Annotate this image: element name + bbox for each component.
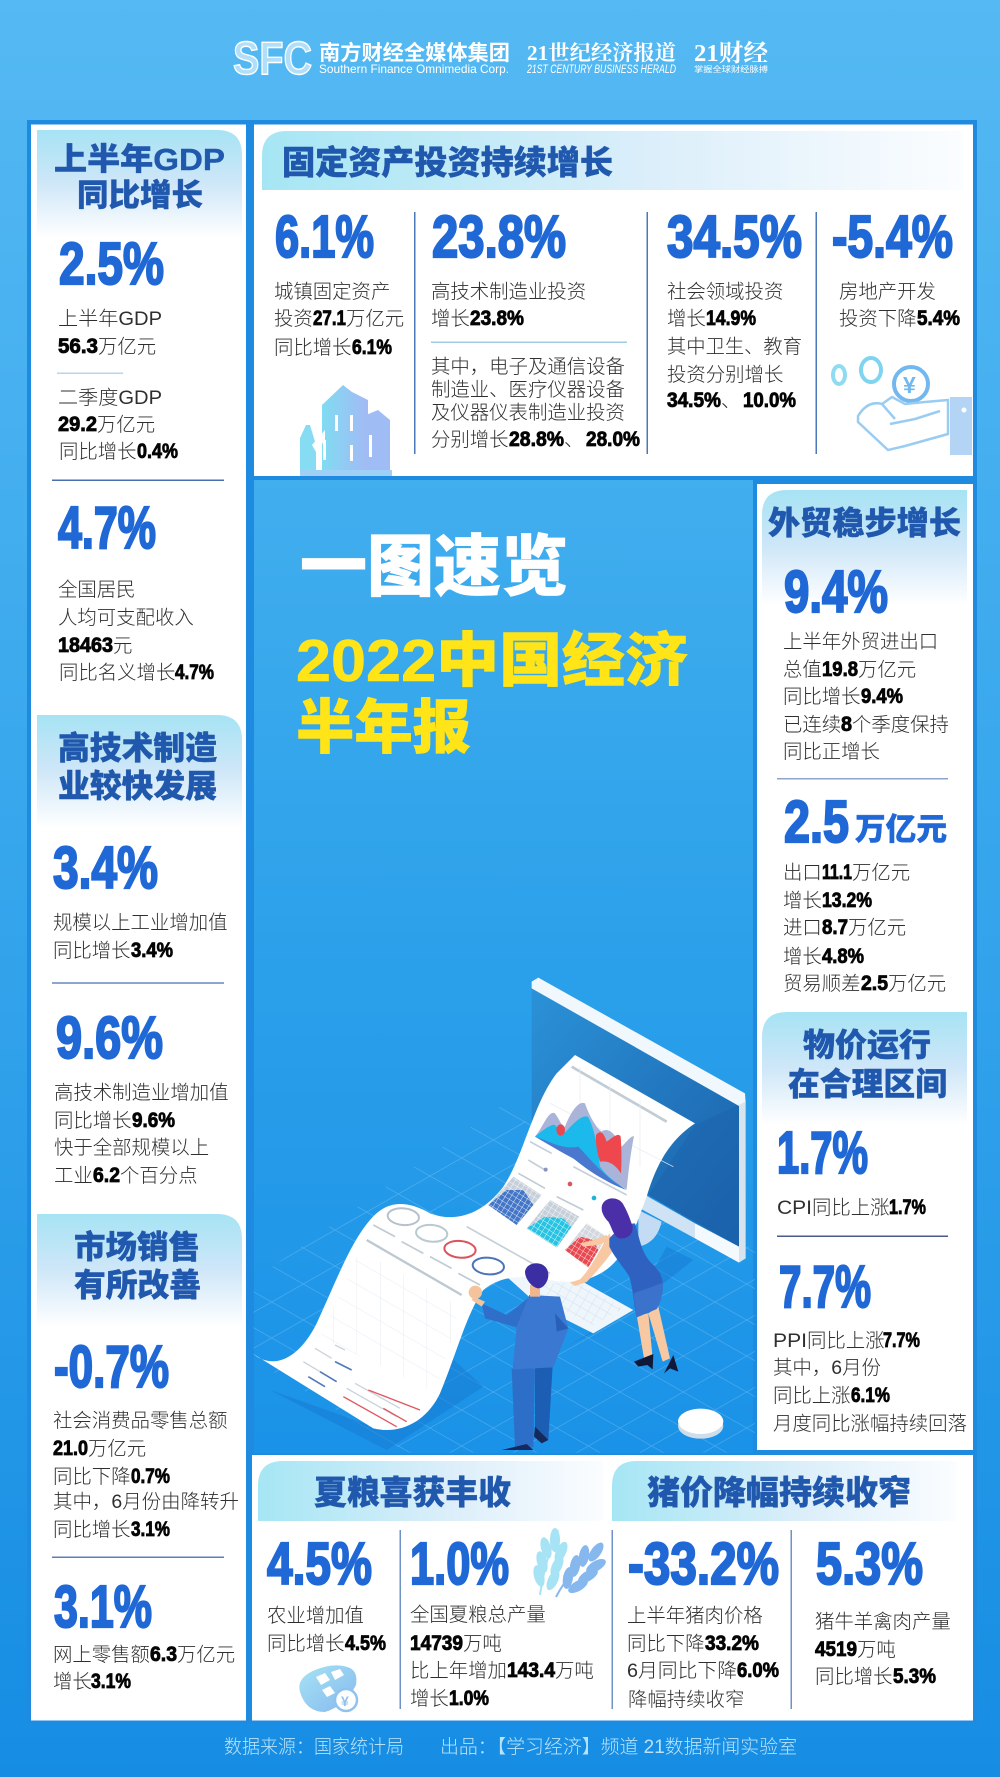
text: high tech investment: 23.8%	[470, 306, 524, 330]
stat: 34.5%: 34.5%	[667, 204, 802, 270]
heading: prices: 在合理区间	[788, 1066, 947, 1102]
stat: 6.1%: 6.1%	[275, 204, 374, 270]
text: pork price: 33.2%	[705, 1631, 759, 1655]
text: high tech detail: 高技术制造业增加值	[54, 1082, 229, 1104]
heading: fixed asset: 固定资产投资持续增长	[282, 144, 613, 181]
logo: 21 finance: 掌握全球财经脉搏	[694, 64, 768, 74]
heading: GDP: 上半年GDP	[54, 142, 225, 177]
text: social investment: 其中卫生、教育	[667, 336, 802, 358]
text: PPI: PPI	[773, 1330, 807, 1352]
panel: bottom summer grain and pork	[252, 1455, 973, 1720]
text: online retail: 网上零售额	[53, 1644, 150, 1666]
text: GDP detail	[57, 308, 178, 463]
panel: fixed asset investment	[254, 124, 973, 476]
text: trade detail: 万亿元	[858, 659, 916, 681]
text: retail detail: 万亿元	[88, 1438, 146, 1460]
text: real estate	[839, 281, 960, 330]
stat: 3.1%: 3.1%	[54, 1574, 152, 1640]
header logos	[233, 32, 769, 84]
footer: source and credits	[224, 1736, 797, 1758]
heading: retail: 有所改善	[74, 1267, 201, 1303]
panel: center hero	[250, 480, 755, 1453]
text: real estate: 房地产开发	[839, 281, 936, 303]
title: one chart overview: 一图速览	[300, 530, 568, 605]
text: income detail: 全国居民	[58, 579, 136, 601]
text: summer grain: 万吨	[463, 1633, 502, 1655]
heading: pork price	[612, 1461, 957, 1521]
heading: retail: 市场销售	[74, 1229, 200, 1265]
text: GDP detail: 29.2	[58, 412, 97, 436]
text: urban investment: 27.1	[313, 306, 346, 330]
text: meat output: 同比增长	[815, 1666, 893, 1688]
text: social investment: 投资分别增长	[667, 364, 783, 386]
text: summer grain	[410, 1604, 594, 1710]
heading: prices	[762, 1012, 967, 1125]
text: trade detail: 同比增长	[783, 686, 861, 708]
heading: fixed asset	[262, 131, 963, 190]
text: high tech detail: 快于全部规模以上	[54, 1137, 209, 1159]
text: high tech investment: 及仪器仪表制造业投资	[431, 402, 625, 424]
text: online retail: 6.3	[150, 1642, 177, 1666]
text: industry	[53, 912, 228, 962]
text: CPI: CPI	[777, 1197, 812, 1219]
title: 2022 economy half-year report	[296, 628, 688, 761]
disc	[678, 1409, 723, 1439]
text: social investment: 10.0%	[743, 388, 796, 412]
text: PPI	[773, 1328, 967, 1435]
text: income detail: 4.7%	[175, 660, 214, 684]
text: social investment	[667, 281, 802, 412]
floor grid	[253, 1107, 755, 1453]
logo: southern finance group	[319, 41, 510, 76]
text: agriculture	[267, 1605, 386, 1655]
heading: high tech: 业较快发展	[58, 768, 217, 804]
stat: 9.4%: 9.4%	[784, 559, 888, 625]
footer: source and credits: 数据来源：国家统计局	[224, 1736, 404, 1758]
text: retail detail: 0.7%	[131, 1464, 170, 1488]
text: high tech investment	[431, 281, 640, 451]
text: high tech detail: 工业	[54, 1165, 93, 1187]
text: income detail: 元	[113, 635, 132, 657]
text: export import: 增长	[783, 890, 822, 912]
text: GDP detail: 二季度GDP	[58, 387, 162, 409]
stat: 9.6%: 9.6%	[56, 1005, 163, 1071]
text: export import: 进口	[783, 917, 822, 939]
text: GDP detail: 万亿元	[98, 336, 156, 358]
stat: 2.5 trillion: 万亿元	[855, 812, 947, 847]
stat: 23.8%: 23.8%	[432, 204, 566, 270]
text: urban investment	[274, 281, 404, 359]
text: trade detail: 个季度保持	[852, 714, 949, 736]
text: high tech detail: 9.6%	[132, 1108, 175, 1132]
text: retail detail: 社会消费品零售总额	[53, 1410, 228, 1432]
man	[469, 1263, 568, 1450]
stat: 1.7%: 1.7%	[777, 1120, 868, 1186]
text: social investment: 增长	[667, 308, 706, 330]
text: meat output: 5.3%	[893, 1664, 936, 1688]
title: 2022 economy half-year report: 2022中国经济	[296, 628, 688, 694]
text: high tech investment: 高技术制造业投资	[431, 281, 586, 303]
stat: 4.7%: 4.7%	[58, 495, 156, 561]
text: income detail: 18463	[58, 633, 113, 657]
icon: farmland and coin	[299, 1665, 357, 1712]
text: high tech investment: 、	[564, 429, 583, 451]
logo: southern finance group: Southern Finance Omnimedia Corp.	[319, 62, 509, 76]
text: summer grain: 全国夏粮总产量	[410, 1604, 546, 1626]
text: pork price: 同比下降	[627, 1633, 705, 1655]
text: retail detail: 其中，6月份由降转升	[53, 1491, 239, 1513]
heading: foreign trade: 外贸稳步增长	[768, 505, 961, 541]
icon: coins and hand: ¥	[903, 372, 916, 398]
text: trade detail: 9.4%	[861, 684, 903, 708]
text: summer grain: 增长	[410, 1688, 449, 1710]
text: social investment: 社会领域投资	[667, 281, 783, 303]
text: income detail: 人均可支配收入	[58, 607, 194, 629]
text: income detail	[58, 579, 214, 684]
text: pork price	[627, 1605, 779, 1711]
stat: 5.3%: 5.3%	[816, 1531, 923, 1597]
text: industry: 规模以上工业增加值	[53, 912, 228, 934]
text: trade detail: 同比正增长	[783, 741, 880, 763]
heading: pork price: 猪价降幅持续收窄	[647, 1474, 911, 1511]
text: trade detail	[783, 631, 949, 763]
text: export import: 增长	[783, 946, 822, 968]
stat: 2.5 trillion: 2.5	[784, 789, 849, 855]
paper sheet	[253, 1055, 695, 1430]
illustration: monitor, paper and people	[253, 978, 755, 1453]
stat: -0.7%: -0.7%	[54, 1334, 169, 1400]
heading: summer grain: 夏粮喜获丰收	[314, 1474, 511, 1511]
text: high tech investment: 增长	[431, 308, 470, 330]
stat: 1.0%: 1.0%	[410, 1531, 509, 1597]
text: export import: 万亿元	[848, 917, 906, 939]
text: agriculture: 4.5%	[345, 1631, 386, 1655]
shadows on floor	[270, 1247, 693, 1450]
text: PPI: 同比上涨	[773, 1385, 851, 1407]
text: industry: 同比增长	[53, 940, 131, 962]
footer: source and credits: 出品：【学习经济】频道 21数据新闻实验室	[440, 1736, 797, 1758]
text: agriculture: 同比增长	[267, 1633, 345, 1655]
text: urban investment: 6.1%	[352, 335, 392, 359]
heading: GDP: 同比增长	[77, 178, 203, 213]
text: GDP detail: 上半年GDP	[58, 308, 162, 330]
logo: 21st century business herald	[526, 41, 676, 76]
heading: prices: 物价运行	[803, 1027, 931, 1063]
text: export import: 贸易顺差	[783, 973, 861, 995]
text: retail detail: 21.0	[53, 1436, 88, 1460]
stat: 7.7%: 7.7%	[779, 1254, 871, 1320]
logo: 21 finance: 21财经	[694, 40, 769, 67]
area chart	[535, 1103, 634, 1190]
text: export import: 11.1	[822, 860, 852, 884]
icon: farmland and coin: ¥	[341, 1693, 349, 1709]
text: export import: 13.2%	[822, 888, 872, 912]
text: GDP detail: 0.4%	[137, 439, 178, 463]
logo: southern finance group: 南方财经全媒体集团	[319, 41, 510, 65]
text: PPI: 7.7%	[883, 1328, 920, 1352]
stat: 2.5 trillion	[784, 789, 947, 855]
text: export import: 8.7	[822, 915, 848, 939]
text: income detail: 同比名义增长	[59, 662, 175, 684]
rings	[387, 1207, 505, 1276]
text: high tech investment: 28.0%	[586, 427, 640, 451]
text: export import: 2.5	[861, 971, 888, 995]
icon: wheat	[531, 1528, 608, 1597]
text: social investment: 14.9%	[706, 306, 756, 330]
text: online retail	[53, 1642, 235, 1693]
woman	[570, 1198, 678, 1373]
text: online retail: 增长	[53, 1671, 92, 1693]
text: summer grain: 比上年增加	[410, 1660, 507, 1682]
text: pork price: 6.0%	[737, 1658, 779, 1682]
text: industry: 3.4%	[131, 938, 173, 962]
text: PPI: 6.1%	[851, 1383, 890, 1407]
text: high tech detail: 同比增长	[54, 1110, 132, 1132]
text: real estate: 5.4%	[917, 306, 960, 330]
heading: summer grain	[258, 1461, 603, 1521]
text: meat output: 4519	[815, 1637, 857, 1661]
text: GDP detail: 万亿元	[97, 414, 155, 436]
text: CPI: 同比上涨	[812, 1197, 890, 1219]
text: social investment: 、	[721, 390, 740, 412]
text: summer grain: 万吨	[555, 1660, 594, 1682]
panel: right column	[757, 484, 973, 1450]
text: export import: 万亿元	[852, 862, 910, 884]
icon: coins and hand	[833, 358, 972, 455]
text: high tech detail: 6.2	[93, 1163, 120, 1187]
text: high tech investment: 28.8%	[509, 427, 564, 451]
text: pork price: 上半年猪肉价格	[627, 1605, 763, 1627]
text: pork price: 6月同比下降	[627, 1660, 737, 1682]
text: high tech detail	[54, 1082, 229, 1187]
text: trade detail: 已连续	[783, 714, 841, 736]
text: high tech investment: 制造业、医疗仪器设备	[431, 379, 625, 401]
logo: SFC: SFC	[233, 32, 312, 84]
text: export import: 4.8%	[822, 944, 864, 968]
text: social investment: 34.5%	[667, 388, 721, 412]
text: urban investment: 投资	[274, 308, 313, 330]
heading: retail	[37, 1214, 242, 1327]
panel: left column	[31, 124, 246, 1720]
text: online retail: 万亿元	[177, 1644, 235, 1666]
heading: high tech: 高技术制造	[58, 730, 217, 766]
text: urban investment: 万亿元	[346, 308, 404, 330]
text: GDP detail: 56.3	[58, 334, 98, 358]
stat: -33.2%: -33.2%	[628, 1531, 779, 1597]
text: retail detail: 同比增长	[53, 1519, 131, 1541]
text: PPI: 同比上涨	[807, 1330, 885, 1352]
heading: foreign trade	[762, 490, 967, 605]
heading: GDP	[37, 130, 242, 238]
text: retail detail	[53, 1410, 239, 1541]
text: real estate: 投资下降	[839, 308, 917, 330]
text: high tech detail: 个百分点	[120, 1165, 198, 1187]
logo: 21st century business herald: 21世纪经济报道	[527, 41, 676, 65]
text: trade detail: 19.8	[822, 657, 858, 681]
text: export import	[783, 860, 946, 995]
text: meat output	[815, 1611, 951, 1688]
text: export import: 万亿元	[888, 973, 946, 995]
text: online retail: 3.1%	[91, 1669, 131, 1693]
text: CPI: 1.7%	[889, 1195, 926, 1219]
text: retail detail: 同比下降	[53, 1466, 131, 1488]
text: PPI: 月度同比涨幅持续回落	[773, 1413, 967, 1435]
logo: 21st century business herald: 21ST CENTURY BUSINESS HERALD	[526, 64, 676, 76]
text: PPI: 其中，6月份	[773, 1357, 881, 1379]
text: summer grain: 1.0%	[449, 1686, 489, 1710]
text: meat output: 万吨	[857, 1639, 896, 1661]
stat: -5.4%: -5.4%	[832, 204, 953, 270]
monitor	[532, 978, 746, 1263]
text: trade detail: 上半年外贸进出口	[783, 631, 938, 653]
heading: high tech	[37, 715, 242, 828]
heatmaps	[488, 1177, 607, 1267]
icon: buildings	[300, 385, 392, 476]
text: export import: 出口	[783, 862, 822, 884]
text: summer grain: 143.4	[507, 1658, 555, 1682]
text: retail detail: 3.1%	[131, 1517, 170, 1541]
stat: 3.4%: 3.4%	[53, 835, 158, 901]
text: high tech investment: 分别增长	[431, 429, 509, 451]
text: high tech investment: 其中，电子及通信设备	[431, 356, 625, 378]
text: agriculture: 农业增加值	[267, 1605, 364, 1627]
keyboard	[507, 1277, 633, 1333]
text: summer grain: 14739	[410, 1631, 463, 1655]
text: trade detail: 8	[841, 712, 852, 736]
text: GDP detail: 同比增长	[59, 441, 137, 463]
text: pork price: 降幅持续收窄	[628, 1689, 744, 1711]
stat: 2.5%: 2.5%	[59, 231, 164, 297]
text: urban investment: 城镇固定资产	[274, 281, 390, 303]
text: trade detail: 总值	[783, 659, 822, 681]
text: urban investment: 同比增长	[274, 337, 352, 359]
text: meat output: 猪牛羊禽肉产量	[815, 1611, 951, 1633]
stat: 4.5%: 4.5%	[267, 1531, 372, 1597]
title: 2022 economy half-year report: 半年报	[296, 695, 471, 761]
